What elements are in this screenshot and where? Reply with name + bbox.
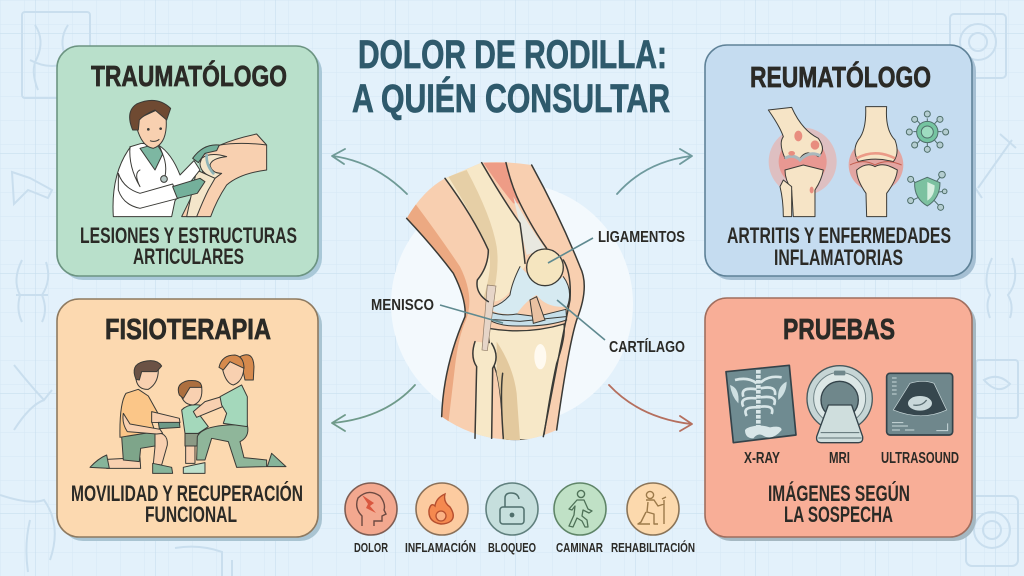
description [80,223,297,269]
panel: fisioterapia [57,299,322,541]
illustration: arthritic and inflamed joints [768,107,949,217]
symptom icon: inflamación: INFLAMACIÓN [405,540,476,555]
symptom icon: caminar [554,483,606,555]
label: cartílago [557,300,685,356]
description: LESIONES Y ESTRUCTURAS [80,223,297,248]
heading: fisioterapia: FISIOTERAPIA [105,314,271,346]
symptom icon: dolor: DOLOR [354,541,388,555]
description [768,481,910,527]
heading: pruebas: PRUEBAS [783,314,895,346]
icon: mri [807,366,872,443]
heading: reumatólogo: REUMATÓLOGO [750,60,931,94]
imaging labels: X-RAY [744,450,781,467]
description: LA SOSPECHA [784,502,893,527]
imaging labels: ULTRASOUND [881,450,959,467]
imaging labels [744,450,959,467]
panel: pruebas [705,298,976,541]
symptom icon: inflamación [405,483,476,555]
description: IMÁGENES SEGÚN [768,481,910,506]
title: DOLOR DE RODILLA: [358,33,667,77]
symptom icon: bloqueo [486,483,538,555]
arrow: knee to reumatólogo [617,149,692,194]
label: cartílago: CARTÍLAGO [609,339,685,356]
description [727,223,951,270]
heading: traumatólogo: TRAUMATÓLOGO [91,59,287,93]
illustration: therapists helping a child [90,355,286,473]
imaging labels: MRI [829,450,850,467]
description [71,481,303,527]
symptom icon: caminar: CAMINAR [556,541,603,555]
symptom icon: rehabilitación [611,483,695,555]
arrow: knee to pruebas [609,385,692,431]
illustration: doctor examining a knee [113,100,267,217]
title: A QUIÉN CONSULTAR [352,76,670,121]
description: MOVILIDAD Y RECUPERACIÓN [71,481,303,506]
description: INFLAMATORIAS [774,245,903,270]
symptom icon: dolor [345,483,397,555]
symptom icon: rehabilitación: REHABILITACIÓN [611,540,695,555]
arrow: knee to traumatólogo [332,149,407,194]
description: ARTICULARES [133,244,244,269]
label: menisco [371,297,503,323]
symptom icon: bloqueo: BLOQUEO [488,541,536,555]
central knee illustration [371,160,685,447]
arrow: knee to fisioterapia [332,385,415,431]
title [352,33,670,121]
panel: traumatólogo [57,46,322,280]
icon: x-ray [726,365,796,443]
icon: ultrasound [887,373,953,435]
label: ligamentos [548,229,685,263]
panel: reumatólogo [705,45,976,280]
label: menisco: MENISCO [371,297,434,314]
description: FUNCIONAL [145,502,237,527]
label: ligamentos: LIGAMENTOS [598,229,685,246]
